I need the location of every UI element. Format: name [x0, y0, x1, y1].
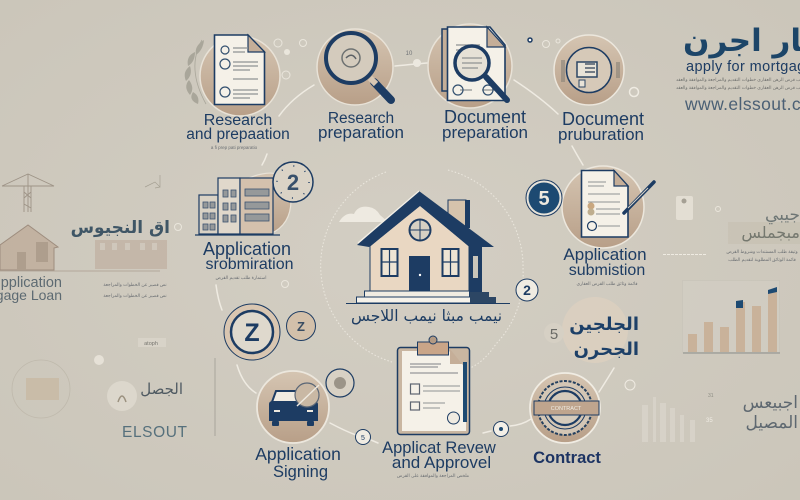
connector arrows [216, 63, 614, 443]
bottom right arabic: اجبيعس [743, 393, 798, 413]
step 7: application signing [255, 369, 370, 481]
step 8: applicant review and approval [382, 336, 508, 478]
icon: laurel [185, 40, 206, 104]
label: srobmiration [205, 256, 294, 273]
icon: clipboard [398, 336, 470, 434]
right faded panel: arabic note: قائمة الوثائق المطلوبة لتقديم الطلب [728, 257, 796, 263]
right faded panel: arabic note: وثيقة طلب المستندات وشروط القرض [726, 249, 798, 254]
arabic center-right label with badge 5: 5 [550, 326, 558, 343]
icon: clock badge 2: 2 [287, 170, 299, 195]
icon: house [346, 191, 510, 304]
icon: document with magnifier [448, 27, 507, 100]
bar chart [682, 280, 780, 353]
step 2: research preparation [317, 29, 404, 142]
bottom right arabic: المصيل [746, 413, 798, 433]
badge: small Z: Z [297, 319, 305, 334]
icon: crane [2, 174, 54, 212]
left faded panel: crane and house [0, 174, 160, 271]
label [318, 110, 404, 142]
step 5: application submission left [195, 162, 313, 288]
left arabic heading [71, 175, 182, 298]
label: ملخص المراجعة والموافقة على القرض [397, 473, 470, 478]
left caption: pplication [1, 275, 62, 291]
icon: seal with building [561, 48, 620, 92]
icon: small seal [326, 369, 354, 397]
arabic center-right label with badge 5 [544, 297, 639, 363]
bottom left logos: atoph [144, 341, 158, 347]
label: and prepaation [186, 126, 290, 143]
icon: cloud [339, 207, 388, 222]
z badges [224, 304, 316, 360]
label: and Approvel [392, 453, 491, 472]
icon: car [269, 391, 318, 426]
bottom left logos: الجصل [140, 380, 183, 398]
icon: seal: CONTRACT [551, 406, 582, 412]
label: Applicat Revew [382, 439, 496, 457]
label: Document [444, 107, 526, 127]
label [563, 245, 647, 286]
icon: document and pen [582, 170, 654, 237]
step 3: document preparation: 10 [406, 51, 413, 57]
center dashed ring [321, 170, 523, 368]
step 3: document preparation [406, 24, 560, 142]
right faded panel: arabic note [663, 196, 800, 263]
label: Application [563, 245, 647, 264]
label: preparation [318, 123, 404, 142]
faded bars bottom right [642, 397, 695, 442]
left arabic heading: نص قصير عن الخطوات والمراجعة [103, 293, 167, 298]
icon: pen seal [295, 383, 319, 407]
label: Research [204, 112, 272, 129]
label: a fi prep pati preparatio [211, 145, 258, 150]
label: قائمة وثائق طلب القرض العقاري [576, 281, 638, 286]
title block [676, 23, 800, 114]
badge: 2 center right [516, 279, 538, 301]
icon: document [214, 35, 264, 104]
icon: badge 5: 5 [538, 188, 550, 210]
step 6: application submission right [526, 166, 654, 286]
bottom right arabic: 31 [708, 393, 714, 399]
arabic center-right label with badge 5: الجلجين [569, 314, 639, 335]
label: Contract [533, 449, 601, 467]
step 4: document pruburation [554, 35, 644, 144]
label [255, 444, 341, 481]
left caption [0, 275, 62, 303]
label: preparation [442, 123, 528, 142]
label: Document [562, 109, 644, 129]
label [382, 439, 496, 478]
step 9: contract [530, 373, 635, 467]
label: pruburation [558, 125, 644, 144]
badge: 2 center right: 2 [523, 282, 531, 298]
right faded panel: arabic note: مبجملس [741, 223, 800, 243]
bottom right arabic: 35 [706, 418, 713, 424]
bottom right arabic [706, 393, 798, 433]
center house [339, 191, 510, 325]
icon: magnifier [326, 33, 391, 100]
label [203, 239, 294, 281]
left arabic heading: نص قصير عن الخطوات والمراجعة [103, 282, 167, 287]
bottom left logos: ELSOUT [122, 424, 188, 441]
label: submistion [569, 262, 645, 279]
label [442, 107, 528, 142]
badge: small 5: 5 [361, 435, 365, 442]
label: Signing [273, 463, 328, 481]
bottom left logos [12, 338, 215, 441]
label: Application [255, 444, 341, 464]
label: Application [203, 239, 291, 259]
right faded panel: arabic note: جيبي [765, 205, 800, 225]
label [558, 109, 644, 144]
label: Research [328, 110, 394, 127]
step 1: research and preparation [185, 35, 306, 150]
arabic center-right label with badge 5: الجحرن [574, 339, 639, 360]
caption: نيمب مبثا نيمب اللاجس [351, 307, 502, 325]
icon: faded house [0, 225, 160, 271]
label: استمارة طلب تقديم القرض [215, 275, 267, 281]
badge: large Z: Z [244, 319, 260, 347]
badge: small dot [494, 422, 508, 436]
left arabic heading: اق النجيوس [71, 218, 170, 238]
icon: buildings [195, 178, 280, 235]
label [186, 112, 290, 150]
